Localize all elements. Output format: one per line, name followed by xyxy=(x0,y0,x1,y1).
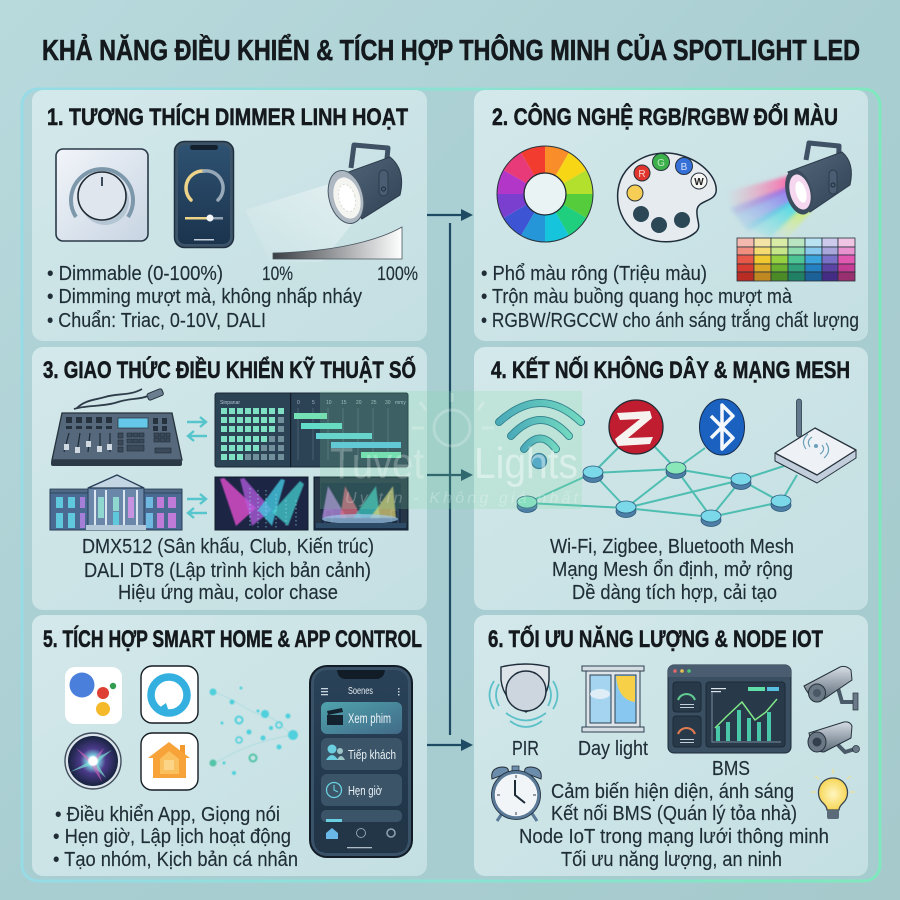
central connector arrows xyxy=(427,209,473,751)
button: Hẹn giờ: Hẹn giờ xyxy=(348,783,382,798)
icon: spotlight with colour beams xyxy=(726,143,851,238)
watermark: Uy tín - Không giá nhất xyxy=(345,490,579,507)
description 4: Mạng Mesh ổn định, mở rộng xyxy=(552,559,793,581)
icon: alarm clock xyxy=(492,766,541,821)
panel 3: protocols xyxy=(32,347,427,610)
label: Day light: Day light xyxy=(578,738,648,760)
icon: google assistant xyxy=(65,667,122,724)
dashboard: scene grid and timeline xyxy=(215,393,408,467)
label: PIR: PIR xyxy=(512,738,539,760)
bullet list 1 xyxy=(47,263,362,332)
icon: wall dimmer xyxy=(56,149,148,241)
panel 2: RGB xyxy=(474,90,868,341)
description 6: Kết nối BMS (Quán lý tỏa nhà) xyxy=(551,803,797,825)
icon: colour swatch grid xyxy=(737,238,855,281)
icon: BMS dashboard xyxy=(668,665,791,753)
icon: bluetooth xyxy=(700,399,744,455)
heading 5: 5. TÍCH HỢP SMART HOME & APP CONTROL xyxy=(43,625,422,653)
icon: wifi xyxy=(499,403,581,468)
dashboard: scene grid and timeline: mmy xyxy=(395,400,406,406)
ramp labels xyxy=(262,264,418,285)
dashboard: scene grid and timeline: 0 xyxy=(297,400,300,406)
description 4: Wi-Fi, Zigbee, Bluetooth Mesh xyxy=(550,536,794,558)
panel 6: energy and IoT xyxy=(474,615,868,876)
dashboard: scene grid and timeline: 10 xyxy=(326,400,332,406)
watermark: Lights xyxy=(474,439,578,488)
icon: RGBW palette: W xyxy=(694,177,704,188)
phone app: Soenes xyxy=(348,686,373,697)
dashboard: scene grid and timeline: 5 xyxy=(312,400,315,406)
icon: PIR sensor xyxy=(490,664,558,727)
panel 1: dimmer xyxy=(32,90,427,341)
bullet list 1: • Dimming mượt mà, không nhấp nháy xyxy=(47,286,362,308)
icon: zigbee xyxy=(609,400,663,454)
icon: colour wheel xyxy=(497,146,593,242)
button: Hẹn giờ xyxy=(321,774,402,806)
mesh network lines xyxy=(527,447,797,517)
icon: home xyxy=(141,733,198,790)
bullet list 5 xyxy=(53,804,298,871)
button: Tiếp khách xyxy=(321,738,402,770)
dashboard: scene grid and timeline: 25 xyxy=(371,400,377,406)
icon: RGBW palette: B xyxy=(681,162,688,173)
description 3: DMX512 (Sân khấu, Club, Kiến trúc) xyxy=(82,536,374,558)
label: BMS: BMS xyxy=(712,758,750,780)
description 6 xyxy=(519,781,829,871)
icon: building facade xyxy=(50,475,182,530)
icon: mesh nodes xyxy=(517,462,791,526)
watermark xyxy=(320,391,582,509)
description 4 xyxy=(550,536,794,604)
panel 5: smart home xyxy=(32,615,427,876)
dashboard: scene grid and timeline: Sinpanar xyxy=(220,400,240,406)
ramp labels: 10% xyxy=(262,264,293,285)
bullet list 1: • Chuẩn: Triac, 0-10V, DALI xyxy=(47,310,266,332)
icon: RGBW palette: G xyxy=(657,158,665,169)
bullet list 2: • Phổ màu rông (Triệu màu) xyxy=(481,263,707,285)
particle network xyxy=(210,686,298,775)
icon: alexa xyxy=(141,666,198,723)
icon: window daylight xyxy=(582,666,644,732)
icon: cameras xyxy=(804,666,860,752)
stage photo right xyxy=(314,477,408,530)
icon: light bulb xyxy=(811,769,855,819)
description 3: DALI DT8 (Lập trình kịch bản cảnh) xyxy=(84,560,371,582)
heading 1: 1. TƯƠNG THÍCH DIMMER LINH HOẠT xyxy=(47,103,408,131)
description 6: Tối ưu năng lượng, an ninh xyxy=(561,849,782,871)
stage photo left xyxy=(215,477,308,530)
heading 3: 3. GIAO THỨC ĐIỀU KHIỂN KỸ THUẬT SỐ xyxy=(43,356,416,384)
bullet list 5: • Điều khiển App, Giọng nói xyxy=(55,804,280,826)
icon: RGBW palette: R xyxy=(638,169,646,180)
icon: siri xyxy=(65,733,121,789)
watermark: Tuvet xyxy=(330,439,424,488)
icon: router xyxy=(775,399,856,483)
arrows bottom xyxy=(187,494,207,518)
description 4: Dề dàng tích hợp, cải tạo xyxy=(572,582,777,604)
phone app xyxy=(310,666,412,857)
arrows top xyxy=(187,417,207,441)
icon: spotlight with white beam xyxy=(245,145,402,262)
dashboard: scene grid and timeline: 30 xyxy=(385,400,391,406)
bullet list 5: • Hẹn giờ, Lập lịch hoạt động xyxy=(53,826,291,848)
button: Xem phim xyxy=(321,702,402,734)
bullet list 5: • Tạo nhóm, Kịch bản cá nhân xyxy=(53,849,298,871)
description 6: Cảm biến hiện diện, ánh sáng xyxy=(551,781,794,803)
bullet list 1: • Dimmable (0-100%) xyxy=(47,263,223,285)
button: Xem phim: Xem phim xyxy=(348,710,391,726)
dashboard: scene grid and timeline: 20 xyxy=(356,400,362,406)
icon: RGBW palette xyxy=(618,153,716,242)
panel 4: wireless mesh xyxy=(474,347,868,610)
icon: dim ramp xyxy=(273,227,402,259)
ramp labels: 100% xyxy=(377,264,418,285)
description 3: Hiệu ứng màu, color chase xyxy=(118,582,338,604)
icon: DMX console xyxy=(51,388,182,466)
dashboard: scene grid and timeline: 15 xyxy=(341,400,347,406)
icon: phone dimmer app xyxy=(174,142,234,248)
bullet list 2: • Trộn màu buồng quang học mượt mà xyxy=(481,286,793,308)
bullet list 2 xyxy=(481,263,859,332)
description 3 xyxy=(82,536,374,604)
button: Tiếp khách: Tiếp khách xyxy=(348,747,396,762)
description 6: Node IoT trong mạng lưới thông minh xyxy=(519,826,829,848)
